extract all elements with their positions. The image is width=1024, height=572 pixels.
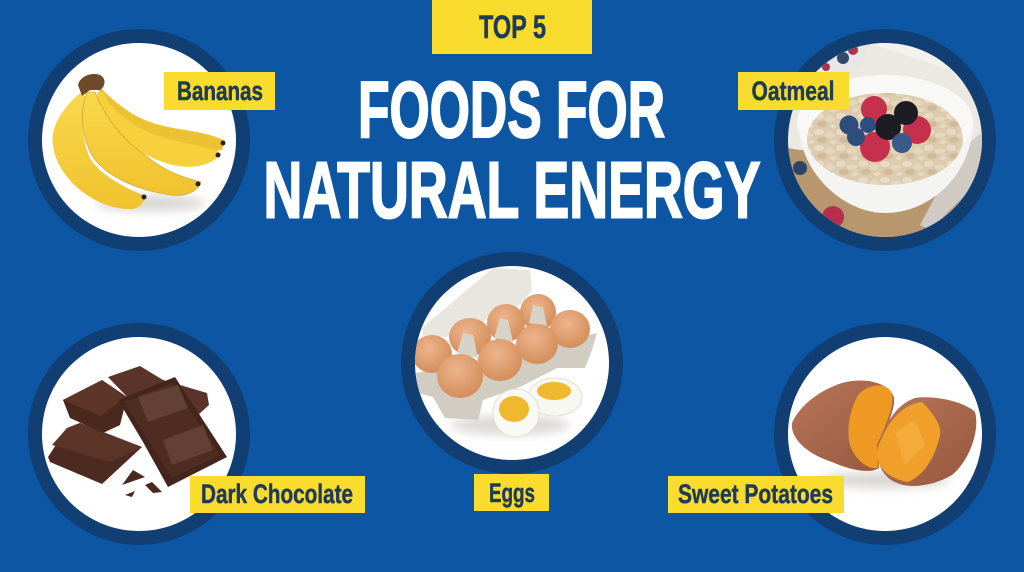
- panel: oatmeal: [774, 29, 996, 251]
- top banner: TOP 5: [479, 9, 546, 45]
- label: Eggs: Eggs: [489, 478, 535, 508]
- label: Bananas: Bananas: [177, 76, 263, 106]
- label: Dark Chocolate: Dark Chocolate: [201, 479, 353, 509]
- label: Dark Chocolate: [190, 476, 365, 513]
- panel: dark chocolate: [28, 323, 250, 545]
- panel: bananas: [28, 29, 250, 251]
- top banner: [432, 0, 592, 54]
- label: Sweet Potatoes: [668, 476, 844, 513]
- icon: oatmeal bowl: [788, 40, 990, 238]
- panel: sweet potatoes: [774, 323, 996, 545]
- icon: chocolate pieces: [48, 366, 227, 497]
- label: Oatmeal: Oatmeal: [752, 76, 834, 106]
- title: FOODS FOR: [358, 65, 665, 154]
- icon: sweet potatoes: [792, 381, 976, 488]
- label: Sweet Potatoes: Sweet Potatoes: [678, 479, 833, 509]
- panel: eggs: [401, 252, 623, 474]
- title: [264, 65, 760, 234]
- label: Bananas: [164, 72, 275, 110]
- title: NATURAL ENERGY: [264, 146, 760, 234]
- label: Oatmeal: [738, 72, 849, 110]
- label: Eggs: [474, 474, 549, 511]
- icon: banana bunch: [52, 74, 225, 211]
- icon: egg carton: [412, 268, 597, 437]
